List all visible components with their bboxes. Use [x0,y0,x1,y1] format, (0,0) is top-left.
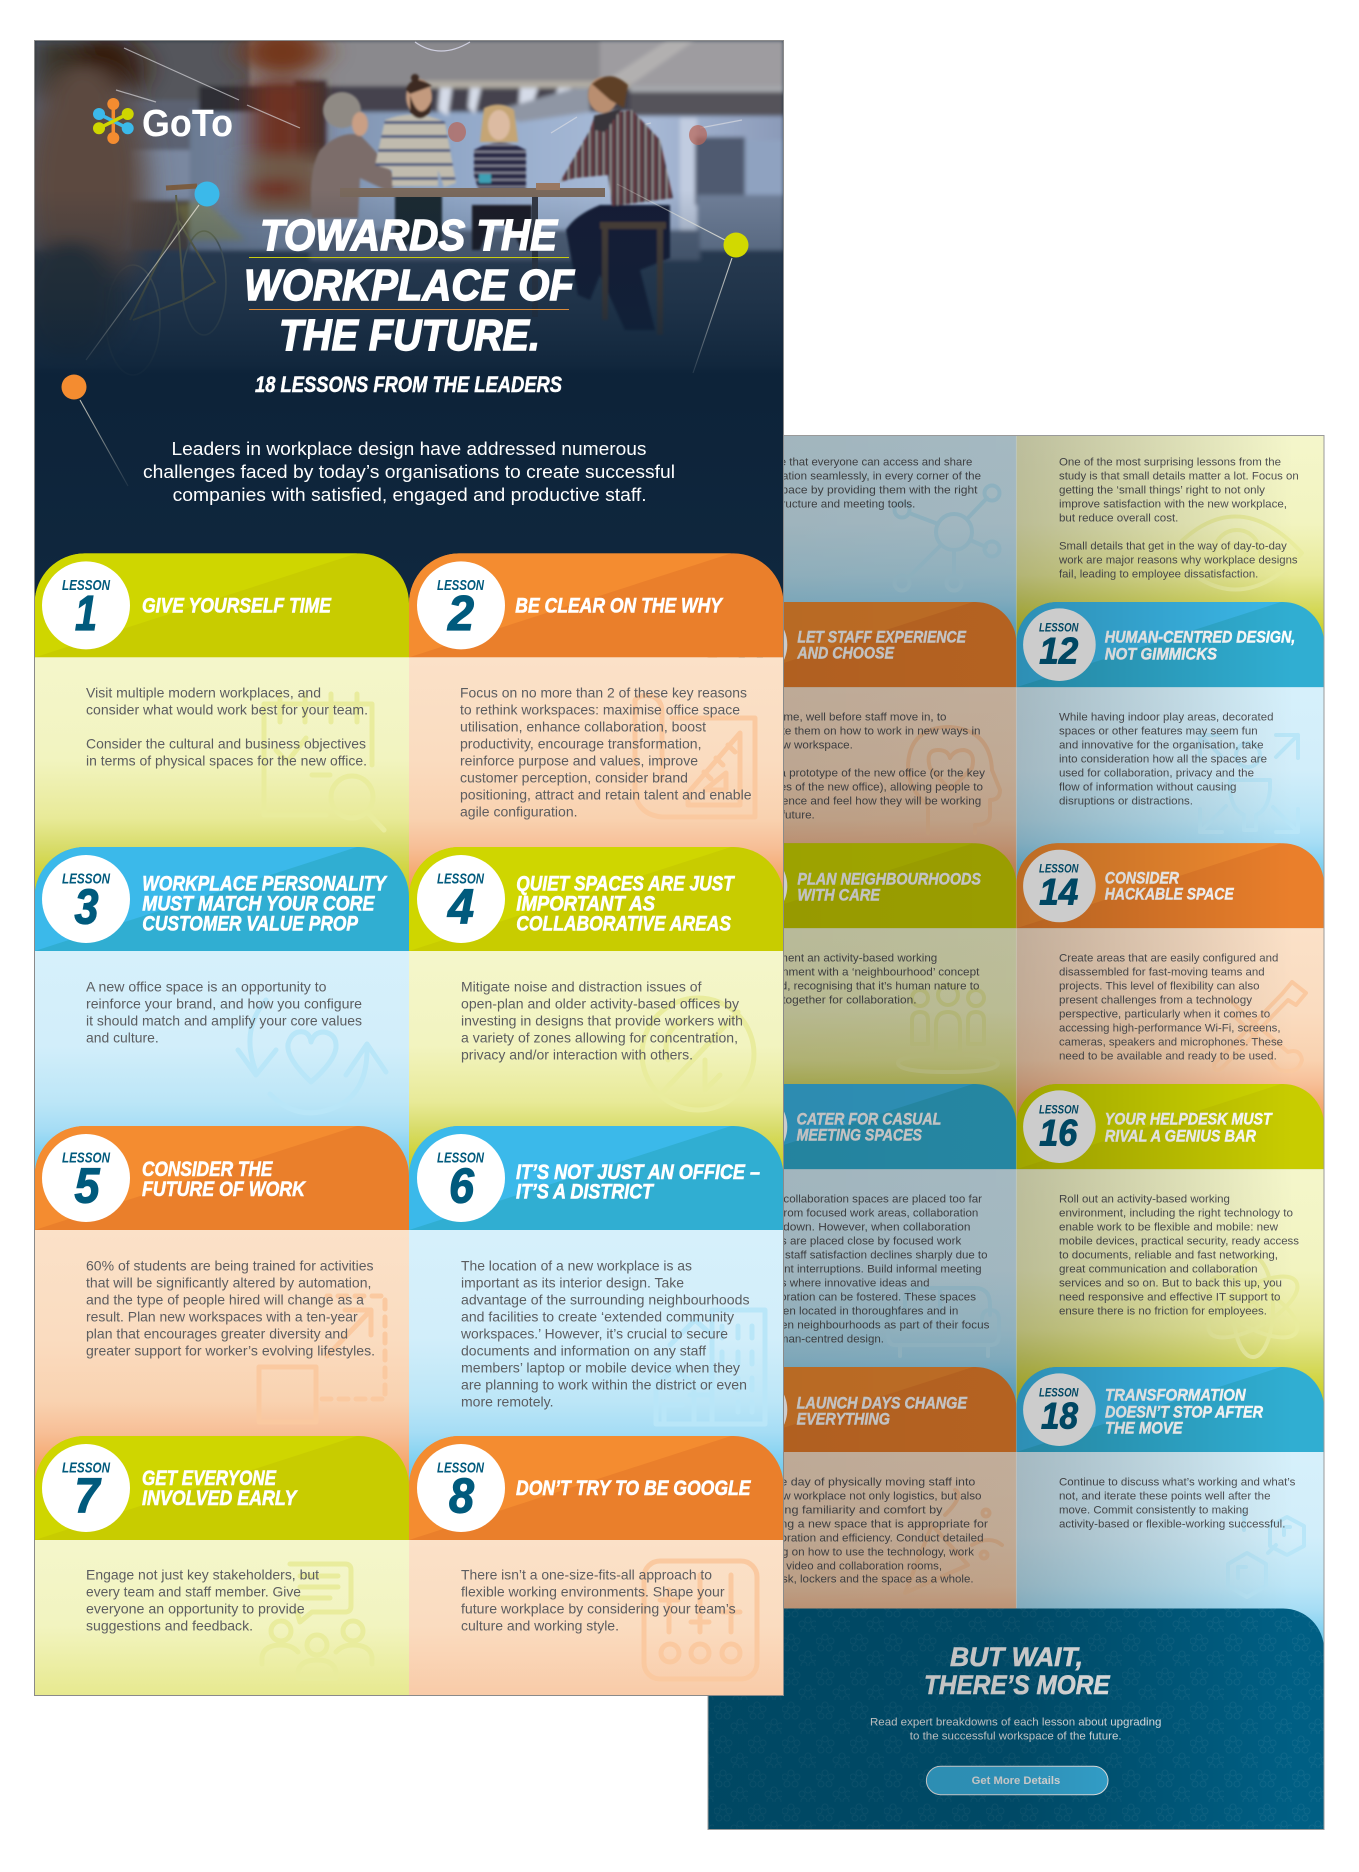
lesson 3 card: A new office space is an opportunity to [86,979,327,994]
lesson 10 body: but reduce overall cost. [1059,512,1178,524]
lesson 15 card: spaces where innovative ideas and [750,1277,930,1289]
lesson 5 card: greater support for worker’s evolving lifestyles. [86,1343,375,1358]
lesson 7 card: GET EVERYONE [142,1467,277,1490]
badge: lesson 16: 16 [1039,1112,1078,1153]
lesson 16 card: enable work to be flexible and mobile: new [1059,1221,1279,1233]
lesson 18 card: activity-based or flexible-working successful. [1059,1518,1285,1530]
title: WORKPLACE OF [244,261,575,310]
lesson 13 card: WITH CARE [797,885,881,904]
heading: but wait: BUT WAIT, [950,1642,1083,1672]
lesson 7 card: INVOLVED EARLY [142,1487,298,1510]
lesson 13 card: environment with a ‘neighbourhood’ concept [750,966,980,978]
intro paragraph [143,439,675,505]
lesson 8 card [409,1436,784,1695]
lesson 2 card: LESSON [437,577,485,594]
lesson 12 card: flow of information without causing [1059,781,1236,793]
lesson 6 card: IT’S NOT JUST AN OFFICE – [516,1161,760,1184]
lesson 3 card: reinforce your brand, and how you configure [86,996,362,1011]
lesson 9 body: information seamlessly, in every corner of the [750,470,981,482]
lesson 16 card: Roll out an activity-based working [1059,1193,1230,1205]
lesson 8 card: There isn’t a one-size-fits-all approach to [461,1567,712,1582]
lesson 15 card: slows down. However, when collaboration [750,1221,970,1233]
lesson 16 card: YOUR HELPDESK MUST [1105,1110,1273,1129]
lesson 6 card [409,1126,784,1486]
lesson 11 card: AND CHOOSE [797,644,895,663]
lesson 11 card: features of the new office), allowing people to [750,781,983,793]
lesson 15 card: spaces are placed close by focused work [750,1235,962,1247]
lesson 2 card: positioning, attract and retain talent and enable [460,788,752,803]
lesson 3 card: 3 [74,881,98,935]
lesson 6 card: important as its interior design. Take [461,1275,684,1290]
badge: lesson 18: LESSON [1039,1385,1079,1399]
logo: GoTo: GoTo [142,103,233,145]
lesson 14 card: cameras, speakers and microphones. These [1059,1036,1283,1048]
lesson 12 card: spaces or other features may seem fun [1059,725,1258,737]
lesson 7 card: LESSON [62,1460,111,1477]
lesson 1 card: GIVE YOURSELF TIME [142,595,332,618]
lesson 13 card: Implement an activity-based working [750,952,937,964]
lesson 5 card: FUTURE OF WORK [142,1178,307,1201]
decorative dot: lime [724,232,748,258]
lesson 6 card: members’ laptop or mobile device when they [461,1360,740,1376]
lesson 4 card: a variety of zones allowing for concentration, [461,1030,738,1045]
lesson 5 card: that will be significantly altered by automation, [86,1275,371,1290]
lesson 12 card: used for collaboration, privacy and the [1059,767,1254,779]
lesson 12 card: into consideration how all the spaces are [1059,753,1267,765]
lesson 14 card: accessing high-performance Wi-Fi, screens, [1059,1022,1280,1034]
seated woman [311,92,397,218]
lesson 9 body: Ensure that everyone can access and share [750,456,972,468]
blurred passers-by [35,41,343,344]
badge: lesson 12: LESSON [1039,620,1079,634]
lesson 5 card: LESSON [62,1150,111,1167]
lesson 15 card: collaboration can be fostered. These spaces [750,1291,976,1303]
lesson 6 card: are planning to work within the district or even [461,1378,747,1392]
lesson 18 card: Continue to discuss what’s working and what’s [1059,1476,1296,1488]
lesson 5 card: result. Plan new workspaces with a ten-year [86,1309,358,1324]
lesson 14 card: disassembled for fast-moving teams and [1059,966,1265,978]
lesson 14 card: need to be available and ready to be used. [1059,1050,1277,1062]
title [244,211,575,360]
badge: lesson 13: LESSON [731,862,771,876]
lesson badges on back sheet [715,608,1096,1446]
lesson 18 card: move. Commit consistently to making [1059,1504,1248,1516]
lesson 6 card: more remotely. [461,1395,554,1410]
heading: but wait [924,1642,1110,1700]
lesson 8 card: LESSON [437,1460,485,1477]
lesson 15 card: MEETING SPACES [797,1125,923,1144]
lesson 13 card [708,843,1016,1125]
lesson 17 card: the desk, lockers and the space as a whole. [750,1573,974,1585]
lesson 2 card: productivity, encourage transformation, [460,737,702,752]
lesson 7 card: Engage not just key stakeholders, but [86,1567,319,1582]
logo: GoTo [93,98,233,145]
lesson 4 card: IMPORTANT AS [516,892,655,916]
lesson 4 card: COLLABORATIVE AREAS [516,912,731,935]
title: TOWARDS THE [260,211,559,260]
lesson 2 card: BE CLEAR ON THE WHY [515,595,724,618]
lesson 11 card [708,602,1016,884]
badge: lesson 13 [715,850,787,922]
lesson 15 card: CATER FOR CASUAL [797,1110,941,1129]
hero photo of office meeting [15,30,784,620]
hero connector lines [80,184,732,486]
lesson 4 card [409,847,784,1176]
subtitle: 18 LESSONS FROM THE LEADERS [255,372,562,397]
lesson 1 card: LESSON [62,577,111,594]
intro paragraph: companies with satisfied, engaged and productive staff. [173,485,647,505]
lesson 9 body: infrastructure and meeting tools. [750,498,915,510]
lesson 3 card: LESSON [62,871,111,888]
lesson 15 card: away from focused work areas, collaboration [750,1207,978,1219]
bicycle [129,184,227,344]
lesson 16 card: services and so on. But to back this up, you [1059,1277,1282,1289]
lesson 15 card: between neighbourhoods as part of their focus [750,1319,990,1331]
lesson 10 body [1016,436,1324,644]
lesson 15 card [708,1084,1016,1409]
standing bearded man [375,74,456,245]
lesson 9 body: workspace by providing them with the right [749,484,978,496]
lesson 11 card: Take time, well before staff move in, to [750,711,946,723]
lesson 1 card: 1 [75,587,97,641]
lesson 16 card: mobile devices, practical security, ready access [1059,1235,1299,1247]
badge: lesson 13: 13 [731,872,770,913]
lesson 4 card: Mitigate noise and distraction issues of [461,979,702,994]
lesson 7 card [35,1436,409,1695]
intro paragraph: challenges faced by today’s organisations to create successful [143,462,675,482]
lesson 6 card: advantage of the surrounding neighbourhoods [461,1292,750,1307]
badge: lesson 16 [1023,1090,1096,1163]
standing man in striped shirt [560,76,673,335]
lesson 4 card: LESSON [437,871,485,888]
lesson 14 card: HACKABLE SPACE [1105,884,1234,903]
lesson 5 card: CONSIDER THE [142,1158,273,1181]
lesson 3 card: MUST MATCH YOUR CORE [142,892,375,916]
panel: back sheet, lessons 9 to 18 [708,436,1324,1830]
lesson 2 card: utilisation, enhance collaboration, boost [460,720,706,735]
lesson 7 card: every team and staff member. Give [86,1584,301,1600]
text: call to action copy: to the successful workspace of the future. [910,1730,1122,1742]
badge: lesson 11 [715,608,787,681]
lesson 9 body [708,436,1016,644]
lesson 1 card: Consider the cultural and business objectives [86,737,366,752]
lesson 15 card: on human-centred design. [750,1333,884,1345]
lesson 16 card: need responsive and effective IT support to [1059,1291,1280,1303]
lesson 8 card: future workplace by considering your team’s [461,1602,736,1617]
lesson 15 card: areas, staff satisfaction declines sharply due to [750,1249,988,1261]
text: call to action copy: Read expert breakdowns of each lesson about upgrading [870,1716,1161,1728]
lesson 18 card: TRANSFORMATION [1105,1385,1246,1404]
lesson 14 card: CONSIDER [1105,869,1180,888]
lesson 2 card: 2 [447,587,474,641]
lesson 17 card: training on how to use the technology, work [750,1546,974,1558]
badge: lesson 15: 15 [731,1112,771,1153]
lesson 14 card: present challenges from a technology [1059,994,1252,1006]
lesson 8 card: DON’T TRY TO BE GOOGLE [516,1477,751,1500]
lesson 14 card: perspective, particularly when it comes to [1059,1008,1270,1020]
lesson 6 card: and facilities to create ‘extended community [461,1309,734,1324]
lesson 2 card: agile configuration. [460,805,578,820]
pendant lamps [448,122,466,142]
button: get more details: Get More Details [972,1775,1060,1787]
lesson 7 card: 7 [74,1470,102,1524]
panel: front sheet [15,30,784,1696]
lesson 16 card: environment, including the right technology to [1059,1207,1293,1219]
lesson 17 card: On the day of physically moving staff into [750,1476,975,1488]
lesson 5 card: plan that encourages greater diversity and [86,1326,348,1341]
badge: lesson 11: LESSON [731,620,771,634]
lesson 17 card: the new workplace not only logistics, but also [750,1490,982,1502]
badge: lesson 15: LESSON [731,1102,771,1116]
lesson 11 card: in the future. [750,809,815,821]
heading: but wait: THERE’S MORE [924,1670,1110,1700]
lesson 6 card: workspaces.’ However, it’s crucial to secure [460,1326,728,1341]
lesson 10 body: improve satisfaction with the new workplace, [1059,498,1287,510]
intro paragraph: Leaders in workplace design have addressed numerous [172,439,646,459]
lesson 18 card: DOESN’T STOP AFTER [1105,1402,1264,1421]
button: get more details [926,1766,1108,1795]
lesson 7 card: suggestions and feedback. [86,1619,253,1634]
lesson 13 card: PLAN NEIGHBOURHOODS [797,870,982,889]
lesson 8 card: culture and working style. [461,1619,619,1634]
lesson 1 card: consider what would work best for your team. [86,703,368,718]
title: THE FUTURE. [279,311,540,360]
lesson 2 card: reinforce purpose and values, improve [460,754,698,769]
meeting table [340,188,605,197]
call to action panel [708,1608,1324,1830]
lesson 6 card: IT’S A DISTRICT [516,1181,655,1204]
lesson 11 card: the new workspace. [750,739,853,751]
lesson 10 body: getting the ‘small things’ right to not only [1059,484,1265,496]
lesson 13 card: come together for collaboration. [750,994,916,1006]
lesson 10 body: One of the most surprising lessons from the [1059,456,1281,468]
lesson 16 card [1016,1084,1324,1409]
lesson 11 card: Build a prototype of the new office (or the key [750,767,985,779]
lesson 2 card: Focus on no more than 2 of these key reasons [460,686,747,701]
badge: lesson 15 [715,1090,787,1163]
decorative dot: orange [62,374,86,400]
lesson 10 body: fail, leading to employee dissatisfaction. [1059,568,1258,580]
badge: lesson 18 [1023,1373,1096,1446]
lesson 17 card: creating a new space that is appropriate for [750,1518,988,1530]
badge: lesson 17: 17 [731,1395,772,1436]
badge: lesson 12 [1023,608,1096,681]
lesson 4 card: QUIET SPACES ARE JUST [516,873,735,896]
lesson 3 card [35,847,409,1176]
lesson 11 card: experience and feel how they will be working [750,795,981,807]
lesson 3 card: WORKPLACE PERSONALITY [142,873,388,896]
lesson 12 card [1016,602,1324,884]
lesson 5 card: 5 [74,1160,100,1214]
lesson 4 card: privacy and/or interaction with others. [461,1047,693,1062]
lesson 4 card: 4 [447,881,474,935]
lesson 3 card: CUSTOMER VALUE PROP [142,912,359,935]
lesson 16 card: to documents, reliable and fast networking, [1059,1249,1278,1261]
lesson 16 card: ensure there is no friction for employees. [1059,1305,1267,1317]
lesson 1 card [35,553,409,897]
badge: lesson 16: LESSON [1039,1102,1079,1116]
lesson 3 card: and culture. [86,1030,159,1045]
lesson 5 card: 60% of students are being trained for activities [86,1258,374,1273]
lesson 5 card: and the type of people hired will change as a [86,1292,364,1307]
lesson 1 card: in terms of physical spaces for the new office. [86,754,367,769]
lesson 15 card: constant interruptions. Build informal meeting [750,1263,982,1275]
lesson 12 card: and innovative for the organisation, take [1059,739,1264,751]
lesson 17 card: EVERYTHING [797,1409,890,1428]
lesson 14 card: Create areas that are easily configured and [1059,952,1278,964]
lesson 12 card: While having indoor play areas, decorated [1059,711,1274,723]
badge: lesson 11: 11 [731,630,770,671]
lesson 11 card: LET STAFF EXPERIENCE [797,628,967,647]
lesson 17 card: desks, video and collaboration rooms, [750,1560,942,1572]
lesson 10 body: study is that small details matter a lot. Focus on [1059,470,1299,482]
lesson 16 card: great communication and collaboration [1059,1263,1258,1275]
lesson 16 card: RIVAL A GENIUS BAR [1105,1127,1257,1146]
badge: lesson 14: 14 [1039,872,1078,913]
lesson 13 card: in mind, recognising that it’s human nature to [750,980,979,992]
lesson 12 card: HUMAN-CENTRED DESIGN, [1105,628,1295,647]
lesson 17 card: LAUNCH DAYS CHANGE [797,1393,968,1412]
badge: lesson 17 [715,1373,787,1446]
lesson 11 card: educate them on how to work in new ways in [750,725,980,737]
badge: lesson 18: 18 [1041,1395,1078,1436]
lesson 18 card: not, and iterate these points well after the [1059,1490,1270,1502]
lesson 6 card: documents and information on any staff [461,1343,706,1358]
lesson 3 card: it should match and amplify your core values [86,1013,362,1028]
lesson 10 body: work are major reasons why workplace designs [1058,554,1298,566]
lesson 8 card: flexible working environments. Shape your [461,1584,725,1600]
badge: lesson 14: LESSON [1039,862,1079,876]
lesson 15 card: are often located in thoroughfares and in [750,1305,958,1317]
lesson 2 card [409,553,784,897]
ceiling streak lights [116,42,742,133]
lesson 2 card: to rethink workspaces: maximise office space [460,703,740,718]
lesson 1 card: Visit multiple modern workplaces, and [86,686,321,701]
lesson 8 card: 8 [449,1470,475,1524]
lesson 6 card: The location of a new workplace is as [461,1258,692,1273]
lesson 6 card: LESSON [437,1150,485,1167]
lesson 4 card: investing in designs that provide workers with [461,1013,743,1028]
lesson 6 card: 6 [449,1160,475,1214]
lesson 2 card: customer perception, consider brand [460,771,688,786]
lesson 18 card: THE MOVE [1105,1419,1183,1438]
badge: lesson 12: 12 [1039,630,1079,671]
text: call to action copy [870,1716,1161,1742]
office background [34,40,784,370]
lesson 14 card: projects. This level of flexibility can also [1059,980,1260,992]
badge: lesson 17: LESSON [731,1385,771,1399]
lesson 12 card: disruptions or distractions. [1059,795,1193,807]
badge: lesson 14 [1023,850,1096,922]
lesson 17 card: collaboration and efficiency. Conduct detailed [750,1532,984,1544]
lesson 14 card [1016,843,1324,1125]
decorative dot: blue [194,182,220,206]
lesson 4 card: open-plan and older activity-based offices by [461,996,739,1011]
lesson 17 card: ensuring familiarity and comfort by [750,1504,943,1516]
lesson 7 card: everyone an opportunity to provide [86,1602,305,1617]
lesson 12 card: NOT GIMMICKS [1105,644,1218,663]
lesson 5 card [35,1126,409,1486]
lesson 10 body: Small details that get in the way of day-to-day [1059,540,1287,552]
lesson 15 card: When collaboration spaces are placed too far [750,1193,982,1205]
seated blonde woman [472,104,532,250]
lesson 17 card [708,1367,1016,1652]
lesson 18 card [1016,1367,1324,1652]
